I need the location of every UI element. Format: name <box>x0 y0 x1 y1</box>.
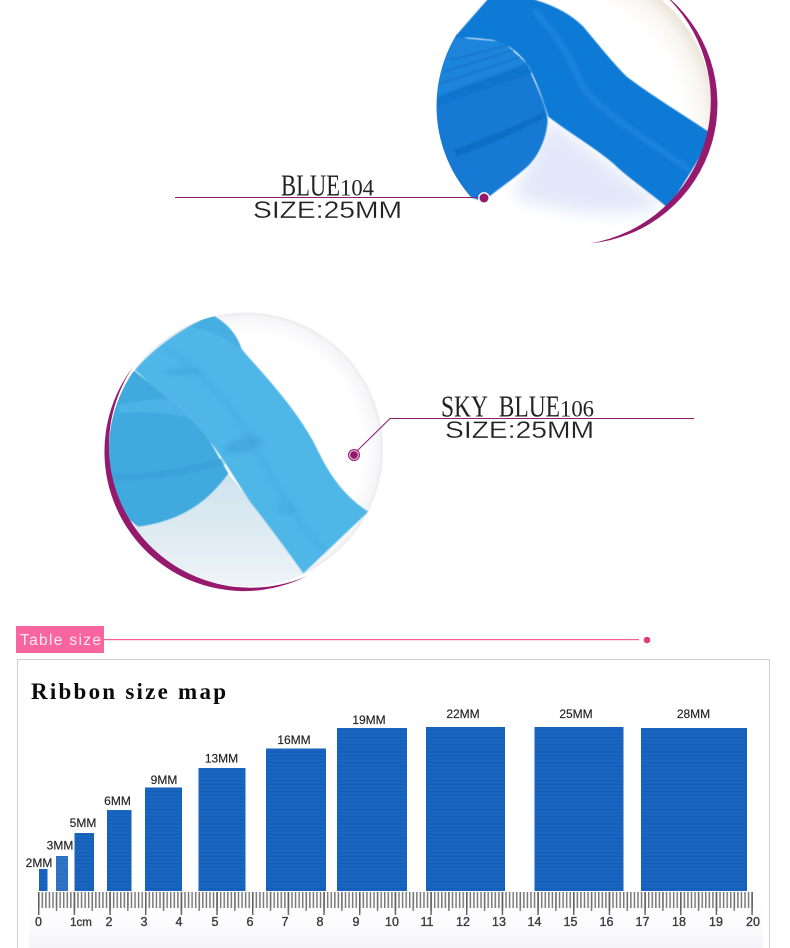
size text: SIZE:25MM <box>445 417 594 444</box>
ruler numbers: 3 <box>141 915 148 929</box>
heading tag <box>16 626 104 653</box>
ruler numbers: 1cm <box>70 917 92 929</box>
callout: SKY BLUE106 label <box>348 388 694 461</box>
panel: sky blue ribbon photo circle <box>97 312 383 598</box>
bar labels: 9MM <box>151 773 177 787</box>
ruler numbers: 17 <box>636 915 649 929</box>
colour number: 104 <box>340 176 374 200</box>
photo: blue ribbon roll <box>436 0 711 218</box>
bar labels: 6MM <box>104 794 131 808</box>
ruler numbers: 8 <box>317 915 324 929</box>
panel: blue ribbon photo circle <box>427 0 717 244</box>
ruler numbers: 7 <box>282 915 289 929</box>
ruler numbers: 15 <box>564 915 577 929</box>
ruler numbers <box>35 915 760 929</box>
ruler numbers: 19 <box>709 915 723 929</box>
chart title: Ribbon size map <box>31 679 226 704</box>
bar labels: 25MM <box>559 707 593 721</box>
bar labels: 13MM <box>205 752 238 766</box>
callout: BLUE104 label <box>175 168 489 224</box>
leader dot <box>479 193 489 203</box>
heading dot <box>644 637 650 643</box>
bar labels: 16MM <box>277 733 311 747</box>
ruler numbers: 9 <box>353 915 360 929</box>
ruler <box>29 892 763 948</box>
photo: sky blue ribbon roll <box>97 312 383 598</box>
section heading: Table size <box>16 626 650 653</box>
panel frame <box>18 660 770 948</box>
ruler numbers: 2 <box>106 915 113 929</box>
colour name: SKY BLUE <box>441 388 560 424</box>
colour number: 106 <box>560 396 594 422</box>
bar labels: 28MM <box>677 707 710 721</box>
colour name: BLUE <box>281 168 340 202</box>
ruler ticks <box>38 892 753 908</box>
panel: ribbon size map <box>18 660 770 948</box>
bar labels: 19MM <box>352 713 386 727</box>
bar labels <box>26 707 710 870</box>
heading text: Table size <box>20 632 101 649</box>
bar labels: 5MM <box>70 816 96 830</box>
bar labels: 2MM <box>26 856 52 870</box>
ruler numbers: 4 <box>176 915 183 929</box>
size text: SIZE:25MM <box>253 197 402 224</box>
ruler numbers: 0 <box>35 915 42 929</box>
ruler numbers: 16 <box>600 915 613 929</box>
ruler numbers: 12 <box>456 915 470 929</box>
ruler numbers: 13 <box>492 915 506 929</box>
heading rule <box>104 639 639 640</box>
ruler body <box>29 892 763 948</box>
ruler numbers: 10 <box>385 915 399 929</box>
ruler numbers: 18 <box>672 915 686 929</box>
purple crescent ring <box>590 0 717 243</box>
leader line <box>175 196 480 198</box>
bar labels: 22MM <box>446 707 480 721</box>
leader line <box>357 418 694 451</box>
bar labels: 3MM <box>47 838 73 852</box>
ribbon width bars <box>39 727 747 891</box>
ruler numbers: 11 <box>421 915 434 929</box>
ruler numbers: 5 <box>212 915 219 929</box>
leader dot <box>348 449 360 461</box>
ruler numbers: 14 <box>528 915 541 929</box>
ruler numbers: 6 <box>247 915 254 929</box>
ruler numbers: 20 <box>746 915 760 929</box>
purple crescent ring <box>104 367 307 591</box>
